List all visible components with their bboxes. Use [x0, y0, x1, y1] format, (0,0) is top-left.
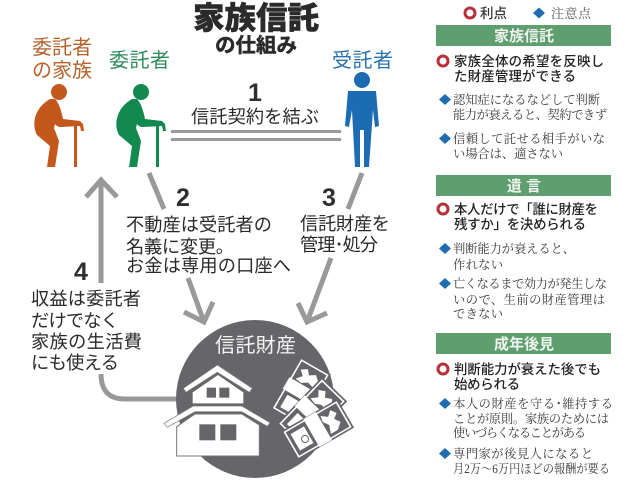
step 4: text: だけでなく — [31, 311, 119, 331]
icon: trustee figure — [345, 72, 379, 167]
caution: incapacity: 判断能力が衰えると、 — [453, 241, 575, 256]
step 1: trust contract: 信託契約を結ぶ — [191, 107, 319, 127]
caution: asset preservation: 使いづらくなることがある — [453, 425, 586, 440]
panel: family trust — [436, 25, 611, 161]
step 2: text: お金は専用の口座へ — [126, 256, 291, 276]
merit — [438, 361, 601, 392]
title: 家族信託 — [193, 1, 319, 36]
step 3: text — [300, 184, 390, 255]
legend: 利点 — [480, 6, 507, 21]
panel: will — [436, 175, 611, 321]
label: trust property: 信託財産 — [215, 334, 296, 357]
icon: elderly settlor with cane — [116, 84, 166, 167]
label: trustee: 受託者 — [332, 49, 393, 72]
step 2: text: 不動産は受託者の — [126, 215, 272, 235]
caution: asset preservation: ことが原則。家族のためには — [453, 411, 609, 426]
legend: 注意点 — [551, 6, 592, 21]
arrow: trust property back to family — [86, 180, 180, 399]
title: の仕組み — [215, 34, 297, 57]
label: settlor: 委託者 — [109, 49, 170, 72]
header: family trust: 家族信託 — [494, 27, 554, 45]
step 2: text — [126, 184, 291, 276]
caution: effect after death: できない — [453, 307, 503, 321]
caution: guardian fee: 専門家が後見人になると — [453, 446, 593, 461]
caution: no trusted person: 信頼して託せる相手がいな — [453, 131, 605, 146]
step 2: text: 2 — [176, 184, 190, 212]
icon: elderly family member with cane — [34, 84, 84, 167]
caution: effect after death: 亡くなるまで効力が発生しな — [453, 276, 607, 291]
header: will — [436, 175, 611, 196]
step 3: text: 3 — [322, 184, 336, 212]
step 4: text — [31, 258, 142, 373]
merit — [438, 201, 598, 232]
header: will: 遺 言 — [507, 178, 541, 195]
label: settlor's family — [32, 36, 92, 82]
step 4: text: 収益は委託者 — [31, 289, 141, 309]
panel: adult guardianship — [436, 333, 613, 476]
caution: asset preservation — [439, 396, 613, 440]
step 4: text: 4 — [74, 258, 88, 286]
caution: effect after death: いので、生前の財産管理は — [453, 292, 605, 307]
trust property circle — [164, 320, 352, 478]
caution: guardian fee — [439, 446, 610, 476]
header: family trust — [436, 25, 611, 46]
caution: dementia: 認知症になるなどして判断 — [453, 92, 600, 107]
step 3: text: 信託財産を — [300, 214, 390, 234]
label: settlor's family: 委託者 — [32, 36, 92, 59]
step 4: text: にも使える — [31, 353, 119, 373]
step 1: trust contract: 1 — [248, 79, 262, 107]
step 1: trust contract — [171, 79, 341, 141]
caution: no trusted person: い場合は、適さない — [453, 146, 563, 161]
merit: 家族全体の希望を反映し — [454, 53, 604, 69]
title — [193, 1, 319, 57]
step 2: text: 名義に変更。 — [126, 237, 234, 257]
icon: bundles of banknotes — [272, 358, 352, 459]
caution: dementia — [439, 92, 607, 122]
caution: guardian fee: 月2万～6万円ほどの報酬が要る — [453, 461, 610, 476]
caution: dementia: 能力が衰えると、契約できず — [453, 107, 607, 122]
merit: 本人だけで「誰に財産を — [454, 201, 598, 217]
label: settlor's family: の家族 — [32, 59, 92, 82]
merit: 始められる — [454, 377, 520, 392]
arrow: trustee to trust property — [298, 173, 362, 322]
caution: asset preservation: 本人の財産を守る･維持する — [453, 396, 613, 411]
legend — [465, 6, 592, 21]
header: adult guardianship: 成年後見 — [494, 335, 554, 353]
merit — [438, 53, 604, 84]
step 4: text: 家族の生活費 — [31, 332, 142, 352]
arrow: settlor to trust property — [149, 173, 213, 322]
merit: 判断能力が衰えた後でも — [454, 361, 601, 377]
icon: house — [164, 365, 270, 456]
caution: no trusted person — [439, 131, 605, 161]
step 3: text: 管理･処分 — [300, 235, 378, 255]
caution: incapacity — [439, 241, 575, 272]
header: adult guardianship — [436, 333, 611, 354]
caution: incapacity: 作れない — [453, 258, 503, 272]
caution: effect after death — [439, 276, 607, 321]
merit: た財産管理ができる — [454, 68, 576, 84]
merit: 残すか」を決められる — [454, 216, 586, 232]
